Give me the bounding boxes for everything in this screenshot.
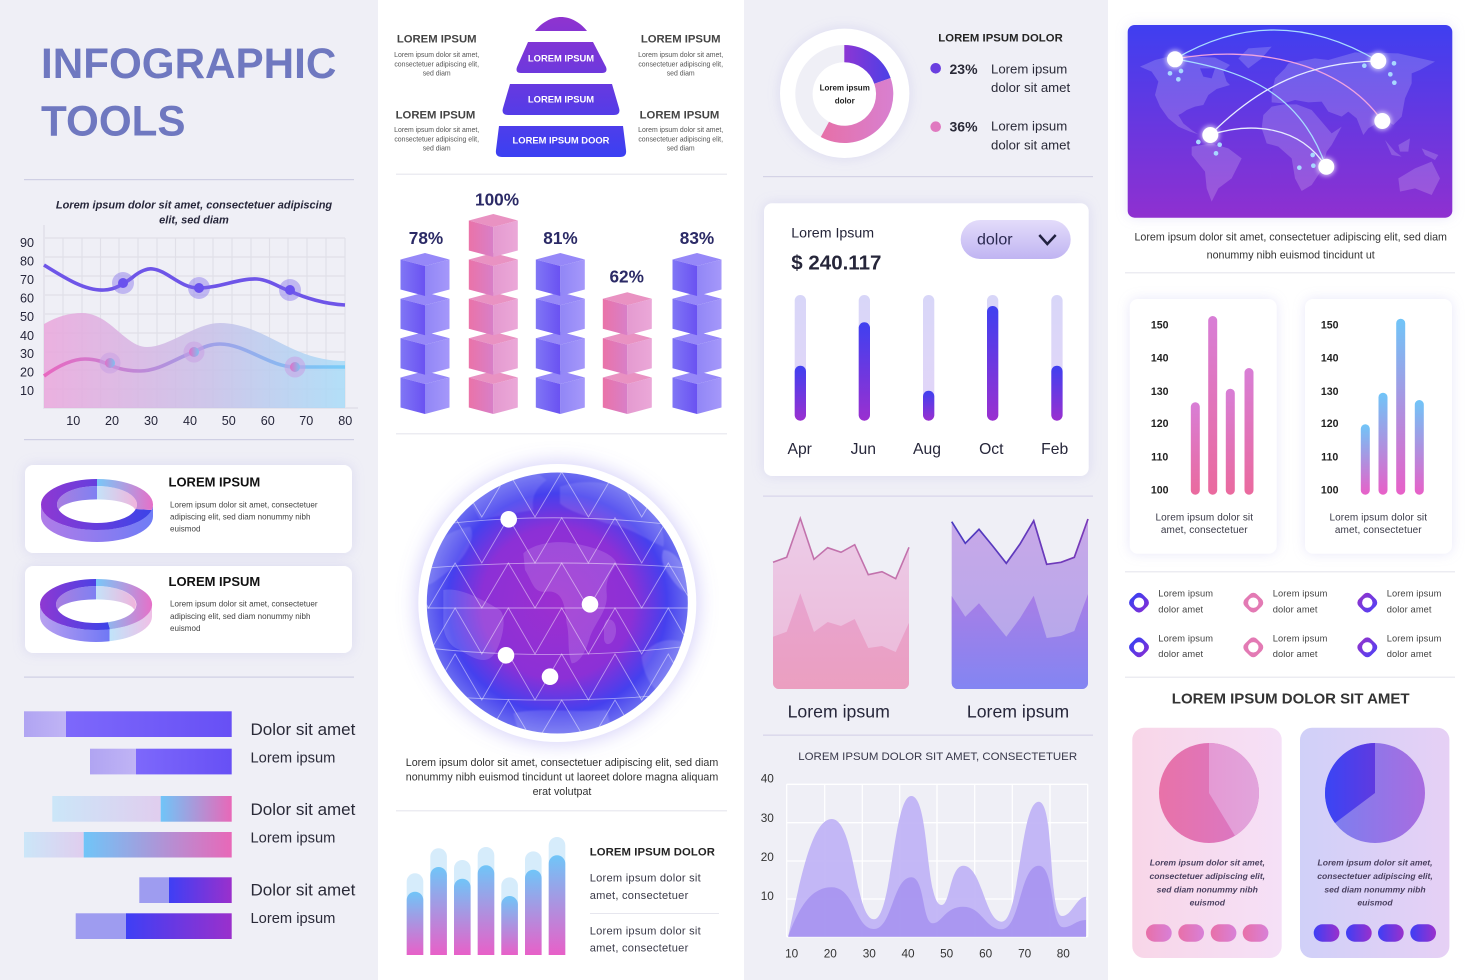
- pyramid side text bottom right: sed diam: [667, 146, 695, 153]
- y axis labels: 80: [20, 254, 34, 268]
- donut legend: dolor sit amet: [991, 137, 1070, 152]
- card caption: Lorem ipsum dolor sit: [1155, 512, 1253, 523]
- pink area chart: Lorem ipsum: [788, 701, 890, 721]
- x axis labels: 20: [824, 946, 837, 960]
- bar chart text: amet, consectetuer: [590, 943, 689, 955]
- map caption: [1134, 232, 1447, 261]
- pyramid side text bottom right: LOREM IPSUM: [640, 110, 719, 122]
- pyramid side text top right: sed diam: [667, 71, 695, 78]
- pyramid diagram: LOREM IPSUM: [528, 53, 594, 64]
- axis labels: 100: [1321, 485, 1339, 497]
- map caption: Lorem ipsum dolor sit amet, consectetuer adipiscing elit, sed diam: [1134, 232, 1447, 244]
- legend text: Lorem ipsum: [1387, 633, 1442, 643]
- globe caption: [406, 757, 718, 798]
- bar chart text: LOREM IPSUM DOLOR: [590, 847, 715, 859]
- axis labels: 140: [1321, 353, 1339, 365]
- cube stack 83%: 83%: [680, 228, 714, 248]
- section heading: LOREM IPSUM DOLOR SIT AMET: [1172, 690, 1410, 707]
- x axis labels: 60: [261, 414, 275, 428]
- card heading: Lorem Ipsum: [791, 225, 874, 241]
- pyramid diagram: LOREM IPSUM DOOR: [513, 135, 610, 146]
- icon legend: [1127, 589, 1442, 659]
- card text: sed diam nonummy nibh: [1324, 884, 1426, 894]
- month labels: [787, 441, 1068, 458]
- bar labels: Lorem ipsum: [250, 750, 335, 766]
- connection arcs: [1175, 30, 1382, 167]
- cube stack 62%: [603, 267, 652, 414]
- legend text: dolor amet: [1158, 649, 1204, 659]
- month labels: Apr: [787, 441, 812, 458]
- donut legend: dolor sit amet: [991, 80, 1070, 95]
- pyramid diagram: LOREM IPSUM: [528, 94, 594, 105]
- pie chart: [1325, 743, 1425, 843]
- cube stack 83%: [672, 228, 722, 414]
- cube stack 81%: 81%: [543, 228, 578, 248]
- month labels: Jun: [851, 441, 876, 458]
- legend text: Lorem ipsum: [1273, 589, 1328, 599]
- card text: consectetuer adipiscing elit,: [1317, 871, 1433, 881]
- card text: LOREM IPSUM: [168, 574, 260, 589]
- icon: 3d donut two: [40, 579, 152, 642]
- month labels: Oct: [979, 441, 1004, 458]
- bar labels: Dolor sit amet: [250, 720, 356, 739]
- continents: [1140, 47, 1440, 202]
- axis labels: [1321, 319, 1339, 497]
- lower wave: [788, 866, 1086, 937]
- cube stack 62%: 62%: [609, 267, 644, 287]
- x axis labels: [785, 946, 1070, 960]
- pills: [1146, 924, 1268, 942]
- data points: [100, 272, 306, 378]
- pyramid side text bottom left: sed diam: [423, 146, 451, 153]
- bar chart text: Lorem ipsum dolor sit: [590, 873, 701, 885]
- panel: column 4: [1108, 0, 1473, 980]
- x axis labels: 60: [979, 946, 993, 960]
- pyramid diagram: [496, 17, 626, 157]
- card: donut one: [25, 465, 352, 553]
- cube stack 100%: 100%: [475, 190, 519, 210]
- y axis labels: [20, 236, 34, 398]
- cube stack 78%: [400, 228, 450, 414]
- pyramid side text bottom right: consectetuer adipiscing elit,: [638, 136, 723, 144]
- bar chart text: amet, consectetuer: [590, 890, 689, 902]
- y axis labels: 20: [761, 850, 774, 864]
- y axis labels: 40: [20, 329, 34, 343]
- card: blue bar chart: [1305, 299, 1452, 554]
- axis labels: 100: [1151, 485, 1169, 497]
- bar labels: Lorem ipsum: [250, 911, 335, 927]
- bar chart text: [590, 847, 719, 955]
- card text: adipiscing elit, sed diam nonummy nibh: [170, 512, 310, 522]
- pink area chart: [773, 518, 909, 721]
- chart heading: LOREM IPSUM DOLOR SIT AMET, CONSECTETUER: [798, 751, 1077, 763]
- y axis labels: [761, 772, 774, 903]
- card caption: amet, consectetuer: [1161, 525, 1248, 536]
- panel: column 3: [744, 0, 1108, 980]
- bar labels: Dolor sit amet: [250, 881, 356, 900]
- month bars: [795, 295, 1063, 421]
- legend text: dolor amet: [1387, 649, 1432, 659]
- y axis labels: 10: [20, 384, 34, 398]
- pyramid side text top left: [394, 34, 479, 78]
- donut legend: 36%: [950, 118, 978, 134]
- horizontal bars: [24, 711, 232, 939]
- donut legend: LOREM IPSUM DOLOR: [938, 33, 1063, 45]
- icons: [1127, 591, 1379, 659]
- chart heading: [56, 200, 332, 226]
- card text: [1317, 858, 1433, 907]
- bars: [1191, 316, 1254, 495]
- x axis labels: 70: [1018, 946, 1032, 960]
- bar labels: Dolor sit amet: [250, 800, 356, 819]
- y axis labels: 10: [761, 889, 774, 903]
- pyramid side text bottom left: [394, 110, 479, 153]
- dropdown pill: dolor: [977, 231, 1013, 248]
- pyramid side text top right: [638, 34, 723, 78]
- card text: sed diam nonummy nibh: [1157, 884, 1258, 894]
- cube column chart: [400, 190, 722, 414]
- title: [41, 40, 336, 144]
- card text: Lorem ipsum dolor sit amet,: [1150, 858, 1265, 868]
- x axis labels: 80: [1057, 946, 1070, 960]
- month labels: Feb: [1041, 441, 1068, 458]
- pyramid side text bottom left: Lorem ipsum dolor sit amet,: [394, 127, 479, 134]
- bar labels: Lorem ipsum: [250, 830, 335, 846]
- card text: Lorem ipsum dolor sit amet, consectetuer: [170, 500, 318, 510]
- purple area chart: [952, 519, 1088, 721]
- card: monthly bars: [764, 203, 1089, 476]
- line chart: [20, 200, 358, 428]
- y axis labels: 30: [761, 811, 774, 825]
- pink line: [44, 344, 345, 376]
- card text: euismod: [170, 525, 200, 534]
- cube stack 81%: [536, 228, 585, 414]
- y axis labels: 20: [20, 366, 34, 380]
- pyramid side text bottom right: [638, 110, 723, 153]
- card: purple pie: [1300, 728, 1449, 958]
- card text: consectetuer adipiscing elit,: [1150, 871, 1265, 881]
- purple area chart: Lorem ipsum: [967, 701, 1069, 721]
- donut legend: 23%: [950, 61, 978, 77]
- card: pink pie: [1132, 728, 1282, 958]
- x axis labels: 40: [183, 414, 197, 428]
- y axis labels: 50: [20, 310, 34, 324]
- axis labels: 140: [1151, 353, 1169, 365]
- x axis labels: 10: [66, 414, 80, 428]
- axis labels: 130: [1321, 386, 1339, 398]
- pyramid side text top right: consectetuer adipiscing elit,: [638, 62, 723, 68]
- x axis labels: 10: [785, 946, 799, 960]
- legend text: Lorem ipsum: [1158, 589, 1213, 599]
- pyramid side text top left: consectetuer adipiscing elit,: [394, 62, 479, 68]
- x axis labels: 80: [338, 414, 352, 428]
- pills: [1314, 924, 1436, 942]
- chart heading: elit, sed diam: [159, 214, 229, 226]
- card heading: [791, 225, 881, 274]
- donut legend: Lorem ipsum: [991, 61, 1067, 76]
- card text: euismod: [170, 624, 200, 633]
- x axis labels: 30: [144, 414, 158, 428]
- cube stack 78%: 78%: [409, 228, 443, 248]
- axis labels: 120: [1321, 418, 1339, 430]
- purple line: [44, 265, 345, 305]
- y axis labels: 90: [20, 236, 34, 250]
- card caption: Lorem ipsum dolor sit: [1329, 512, 1427, 523]
- title: TOOLS: [41, 98, 186, 144]
- donut legend: Lorem ipsum: [991, 119, 1067, 134]
- card text: [1150, 858, 1265, 907]
- donut chart: dolor: [835, 97, 855, 106]
- pyramid side text bottom right: Lorem ipsum dolor sit amet,: [638, 127, 723, 134]
- legend text: dolor amet: [1273, 604, 1318, 614]
- donut chart: [780, 29, 909, 158]
- card text: euismod: [1190, 897, 1226, 907]
- legend text: Lorem ipsum: [1273, 633, 1328, 643]
- x axis labels: [66, 414, 352, 428]
- wave area chart: [761, 751, 1088, 960]
- y axis labels: 30: [20, 347, 34, 361]
- y axis labels: 40: [761, 772, 774, 786]
- dropdown pill: [961, 220, 1071, 259]
- pink to blue area: [44, 313, 345, 408]
- bars: [1361, 319, 1424, 495]
- axis labels: 110: [1151, 451, 1168, 463]
- legend text: Lorem ipsum: [1387, 589, 1442, 599]
- rounded bar chart: [407, 837, 565, 955]
- legend text: dolor amet: [1158, 604, 1204, 614]
- globe caption: nonummy nibh euismod tincidunt ut laoreet dolore magna aliquam: [406, 772, 718, 784]
- month labels: Aug: [913, 441, 941, 458]
- card text: Lorem ipsum dolor sit amet,: [1317, 858, 1433, 868]
- pyramid side text top left: Lorem ipsum dolor sit amet,: [394, 52, 479, 59]
- city nodes: [1166, 50, 1392, 176]
- card caption: [1155, 512, 1253, 536]
- legend text: [1158, 589, 1442, 659]
- globe location dots: [498, 511, 598, 685]
- x axis labels: 20: [105, 414, 119, 428]
- card text: adipiscing elit, sed diam nonummy nibh: [170, 612, 310, 621]
- panel: column 1: [0, 0, 378, 980]
- chart heading: Lorem ipsum dolor sit amet, consectetuer adipiscing: [56, 200, 332, 212]
- x axis labels: 70: [299, 414, 313, 428]
- world map: [1128, 25, 1452, 218]
- legend text: dolor amet: [1273, 649, 1318, 659]
- legend text: Lorem ipsum: [1158, 633, 1213, 643]
- globe caption: Lorem ipsum dolor sit amet, consectetuer adipiscing elit, sed diam: [406, 757, 718, 769]
- x axis labels: 50: [222, 414, 236, 428]
- pyramid side text bottom left: LOREM IPSUM: [396, 110, 475, 122]
- card text: euismod: [1357, 897, 1393, 907]
- x axis labels: 40: [901, 946, 915, 960]
- axis labels: [1151, 319, 1169, 497]
- bar chart text: Lorem ipsum dolor sit: [590, 925, 701, 937]
- pyramid side text top right: Lorem ipsum dolor sit amet,: [638, 52, 723, 59]
- y axis labels: 70: [20, 273, 34, 287]
- globe caption: erat volutpat: [533, 786, 591, 798]
- bar labels: [250, 720, 356, 927]
- pyramid side text top left: sed diam: [423, 71, 451, 78]
- y axis labels: 60: [20, 292, 34, 306]
- card: pink bar chart: [1130, 299, 1277, 554]
- card text: LOREM IPSUM: [168, 475, 260, 490]
- axis labels: 130: [1151, 386, 1169, 398]
- donut legend: [930, 33, 1070, 152]
- x axis labels: 30: [863, 946, 876, 960]
- cube stack 100%: [469, 190, 519, 414]
- upper wave: [788, 796, 1086, 937]
- card text: Lorem ipsum dolor sit amet, consectetuer: [170, 600, 318, 609]
- small dots: [1168, 61, 1397, 170]
- legend text: dolor amet: [1387, 604, 1432, 614]
- icon: 3d donut one: [41, 479, 153, 542]
- globe: [402, 461, 699, 745]
- pyramid side text top left: LOREM IPSUM: [397, 34, 477, 46]
- card caption: [1329, 512, 1427, 536]
- panel: column 2: [378, 0, 744, 980]
- card caption: amet, consectetuer: [1335, 525, 1422, 536]
- card text: [168, 574, 318, 633]
- title: INFOGRAPHIC: [41, 40, 336, 87]
- axis labels: 120: [1151, 418, 1169, 430]
- axis labels: 150: [1151, 319, 1169, 331]
- pyramid side text bottom left: consectetuer adipiscing elit,: [394, 136, 479, 144]
- pyramid side text top right: LOREM IPSUM: [641, 34, 721, 46]
- donut chart: Lorem ipsum: [820, 84, 870, 93]
- card heading: $ 240.117: [791, 251, 881, 274]
- card text: [168, 475, 318, 534]
- pie chart: [1159, 743, 1259, 843]
- x axis labels: 50: [940, 946, 954, 960]
- axis labels: 150: [1321, 319, 1339, 331]
- axis labels: 110: [1321, 451, 1338, 463]
- map caption: nonummy nibh euismod tincidunt ut: [1207, 249, 1375, 261]
- card: donut two: [25, 566, 352, 653]
